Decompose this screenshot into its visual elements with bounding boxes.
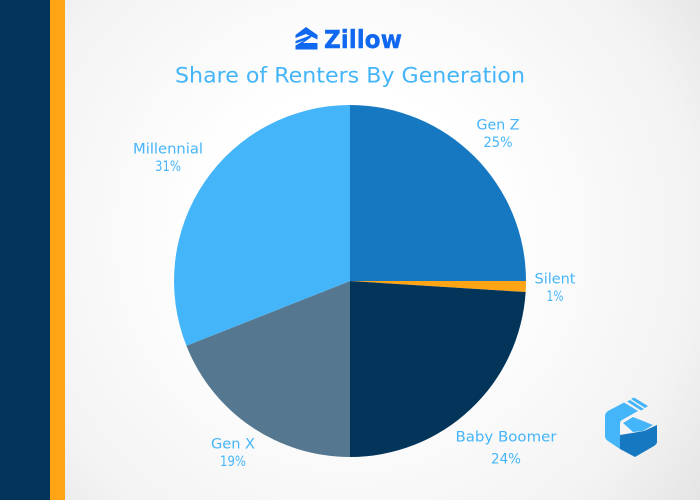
label: Silent (534, 272, 576, 305)
Zillow logo (296, 25, 402, 54)
icon: brand logo (605, 398, 657, 457)
label: Gen Z: Gen Z (476, 118, 520, 134)
pie chart (174, 105, 526, 457)
label: Silent: Silent (534, 272, 576, 288)
orange side band (50, 0, 65, 500)
label: Baby Boomer: 24% (491, 452, 521, 468)
Zillow wordmark: Zillow (324, 25, 402, 54)
label: Gen Z (476, 118, 520, 151)
navy side band (0, 0, 50, 500)
icon: Zillow house (296, 27, 318, 50)
title: Share of Renters By Generation (175, 64, 525, 88)
slice: Silent 1% (350, 281, 526, 292)
label: Gen X (211, 436, 255, 470)
label: Millennial: Millennial (133, 142, 203, 158)
label: Millennial: 31% (155, 159, 181, 175)
label: Millennial (133, 142, 203, 175)
slice: Baby Boomer 24% (350, 281, 526, 457)
label: Baby Boomer (456, 430, 557, 468)
label: Baby Boomer: Baby Boomer (456, 430, 557, 446)
label: Silent: 1% (546, 289, 564, 305)
label: Gen Z: 25% (484, 135, 512, 151)
slice: Gen X 19% (186, 281, 350, 457)
label: Gen X: Gen X (211, 436, 255, 452)
label: Gen X: 19% (220, 454, 246, 470)
slice: Millennial 31% (174, 105, 350, 346)
slice: Gen Z 25% (350, 105, 526, 281)
